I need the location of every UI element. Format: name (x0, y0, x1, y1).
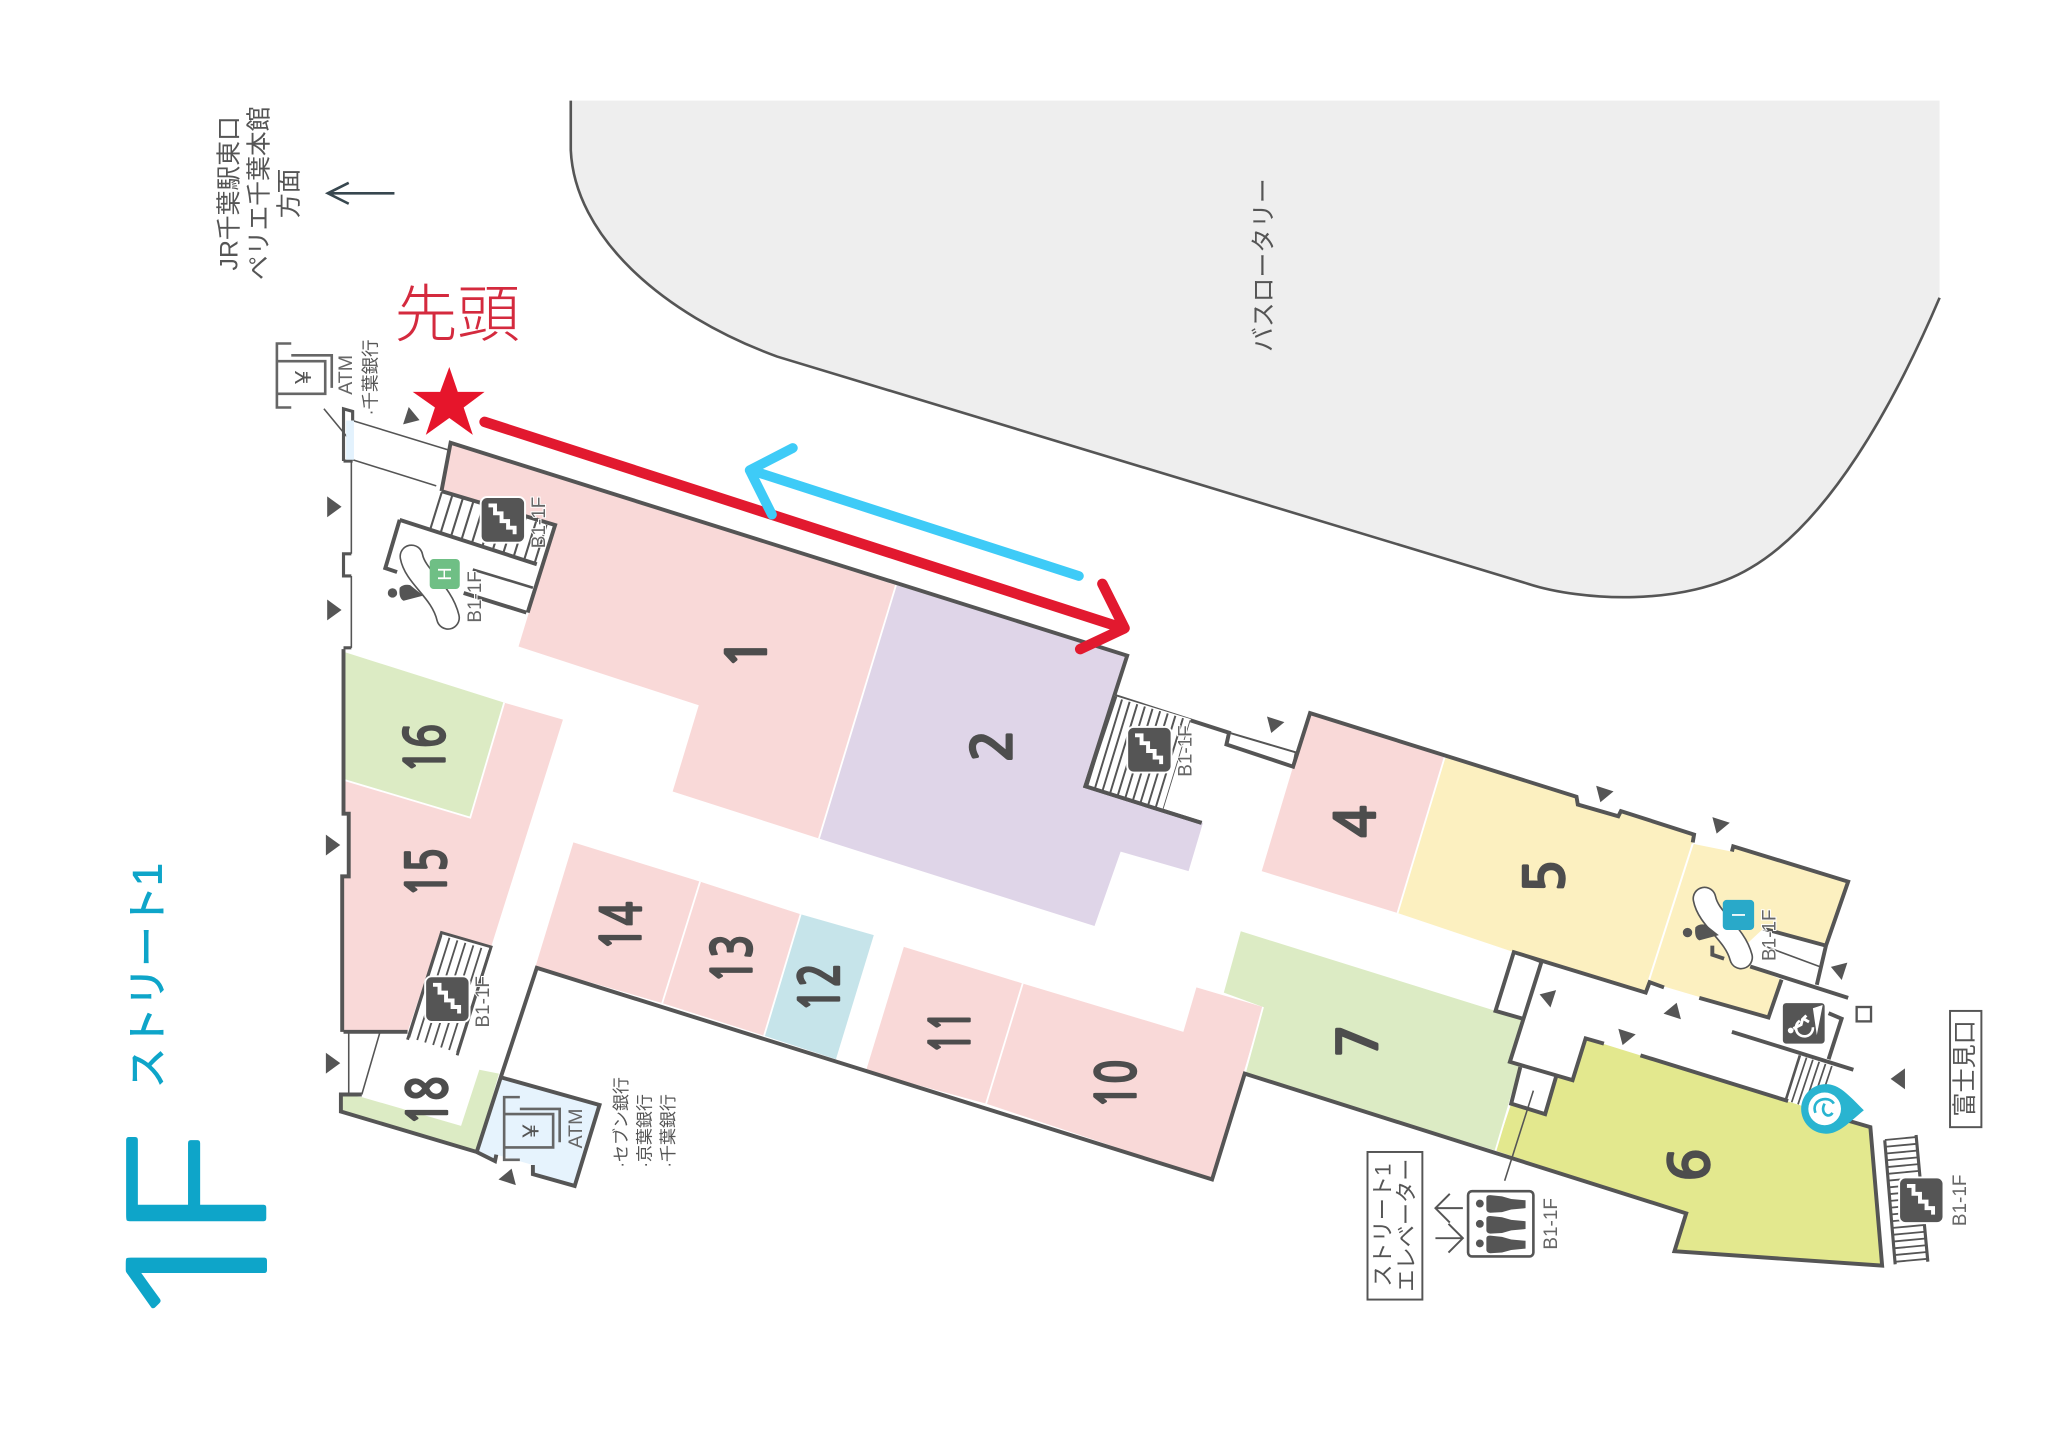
stairs near room 6 (1785, 1055, 1827, 1101)
room 2: 2 (967, 729, 1021, 762)
room 13: 13 (707, 934, 761, 983)
blue arrow: return direction (750, 448, 1079, 576)
room 16 (344, 652, 504, 818)
ATM icon top (277, 344, 332, 408)
outside stairs right (1885, 1135, 1928, 1264)
room 6 (1496, 1038, 1882, 1266)
star: head of queue (413, 367, 485, 435)
icon: stairs outside (1899, 1177, 1944, 1223)
floor subtitle: Street 1: ストリート1 (125, 863, 171, 1088)
bus rotary area (571, 101, 1940, 597)
room 10 (986, 983, 1263, 1179)
room 4: 4 (1330, 805, 1384, 838)
room 4 (1262, 713, 1445, 913)
elevator icon (1468, 1191, 1533, 1256)
stairs near room 1 (385, 491, 555, 613)
escalator H near room 1 (388, 556, 460, 618)
floor labels B1-1F: B1-1F (529, 497, 550, 548)
room 7: 7 (1333, 1024, 1387, 1058)
direction arrow (328, 183, 394, 204)
bank list bottom: ·セブン銀行 (611, 1077, 631, 1168)
elevator label box: エレベーター (1394, 1159, 1419, 1292)
room 15 (341, 703, 563, 1032)
elevator label box: ストリート1 (1371, 1163, 1396, 1287)
small square marker (1857, 1007, 1871, 1021)
room 13 (662, 882, 801, 1036)
floor labels B1-1F: B1-1F (1950, 1175, 1971, 1226)
room 12: 12 (795, 963, 849, 1012)
elevator label box (1368, 1152, 1422, 1300)
light blue entrance (346, 421, 354, 460)
icon: stairs 1 (481, 497, 525, 543)
floor labels B1-1F: B1-1F (465, 571, 486, 623)
ATM label bottom: ATM (565, 1109, 587, 1148)
bank list bottom (611, 1077, 678, 1168)
floor labels B1-1F (465, 497, 1971, 1250)
elevator person 1 (1476, 1195, 1526, 1213)
icon: stairs 15 (425, 976, 470, 1022)
room 12 (764, 914, 874, 1059)
building walls (324, 409, 1882, 1266)
entrance triangles (326, 407, 1905, 1185)
bus rotary label: バスロータリー (1251, 178, 1278, 352)
ATM icon top: ¥ (290, 370, 316, 385)
room 16: 16 (400, 724, 454, 773)
bank list bottom: ·京葉銀行 (636, 1094, 655, 1168)
floor title: 1F: 1F (105, 1137, 294, 1340)
ATM room (477, 1078, 600, 1186)
floor labels B1-1F: B1-1F (1541, 1198, 1562, 1250)
bank list bottom: ·千葉銀行 (659, 1094, 678, 1168)
ATM icon bottom: ¥ (517, 1124, 543, 1139)
ATM icon bottom (504, 1097, 560, 1160)
floor labels B1-1F: B1-1F (1175, 725, 1196, 777)
ATM label top: ATM (335, 355, 357, 395)
escalator person (388, 585, 423, 601)
stairs beside room 2 (1085, 696, 1202, 823)
room 11: 11 (925, 1010, 979, 1054)
room 18: 18 (403, 1076, 457, 1126)
room 1 (441, 443, 896, 839)
room 7 (1224, 931, 1523, 1151)
direction label: JR Chiba station (215, 107, 303, 280)
icon: stairs 2 (1127, 727, 1172, 773)
red arrow: queue direction (485, 422, 1125, 649)
direction label: JR Chiba station: JR千葉駅東口 (215, 116, 243, 270)
icon: location pin (1801, 1084, 1864, 1134)
queue head label: 先頭 (394, 280, 520, 350)
bank label top: ·千葉銀行 (360, 340, 380, 415)
room 5: 5 (1519, 860, 1573, 893)
room 10: 10 (1091, 1059, 1145, 1109)
escalator I in room 5 (1683, 899, 1754, 957)
floor labels B1-1F: B1-1F (1759, 909, 1780, 961)
floor labels B1-1F: B1-1F (473, 976, 494, 1028)
Fujimi exit label box: 富士見口 (1952, 1020, 1979, 1117)
room 5 (1398, 758, 1848, 1017)
icon: I badge: I (1728, 912, 1749, 917)
room 18 (341, 1070, 499, 1152)
icon: wheelchair (1782, 1002, 1825, 1044)
direction label: JR Chiba station: 方面 (275, 168, 303, 218)
elevator person 2 (1476, 1216, 1526, 1234)
room 14 (536, 842, 700, 1003)
room 15: 15 (401, 848, 455, 897)
room 14: 14 (596, 901, 650, 951)
room 2 (819, 585, 1203, 926)
stairs in room 15 (408, 933, 491, 1055)
room 11 (866, 947, 1023, 1104)
room 1: 1 (721, 636, 775, 670)
room 6: 6 (1664, 1148, 1718, 1182)
elevator arrows (1435, 1194, 1463, 1253)
elevator person 3 (1476, 1236, 1526, 1253)
direction label: JR Chiba station: ペリエ千葉本館 (245, 107, 273, 280)
escalator person (1683, 924, 1719, 940)
icon: H badge: H (434, 567, 455, 581)
